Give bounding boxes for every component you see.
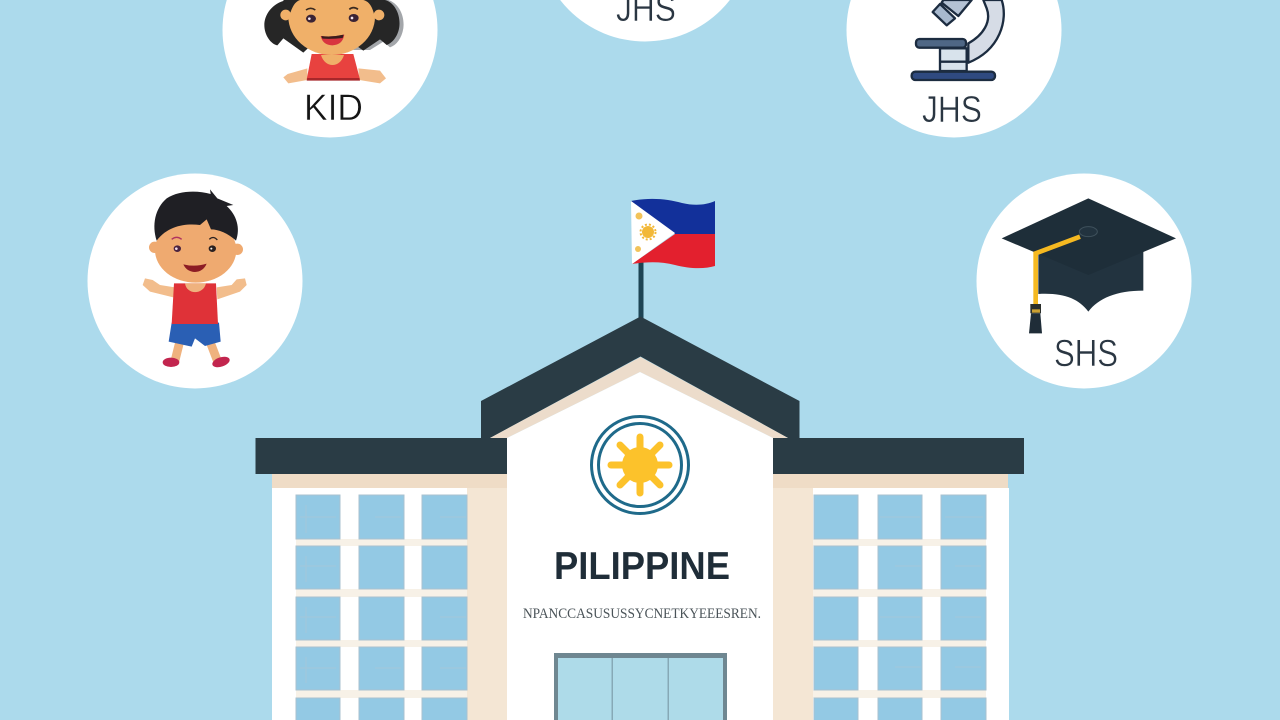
flag on pole (631, 199, 715, 318)
label: KID: KID (304, 87, 363, 128)
school building (256, 316, 1024, 720)
icon: graduation cap (1002, 198, 1176, 333)
right wing (773, 474, 1009, 720)
eave: left (256, 438, 507, 474)
icon: girl (264, 0, 404, 83)
eave: right (773, 438, 1024, 474)
icon: boy (143, 189, 247, 369)
emblem (592, 416, 688, 514)
panel: graduation cap circle (976, 174, 1192, 388)
central facade (490, 357, 788, 720)
label: SHS: SHS (1054, 333, 1118, 375)
label: JHS: JHS (922, 89, 982, 130)
panel: boy circle (88, 174, 302, 388)
panel: top centre JHS circle (538, 0, 752, 42)
panel: microscope circle (846, 0, 1062, 138)
entrance door (554, 653, 727, 720)
school name: PILIPPINE (554, 545, 730, 588)
gable roof (481, 316, 800, 438)
flag pole (638, 262, 644, 318)
left wing (272, 474, 507, 720)
garbled subtitle: NPANCCASUSUSSYCNETKYEEESREN. (523, 606, 761, 622)
Philippine flag (631, 199, 715, 268)
left wing windows (296, 495, 467, 720)
icon: microscope (912, 0, 1004, 80)
right wing windows (814, 495, 986, 720)
panel: kid circle (girl) (222, 0, 438, 138)
